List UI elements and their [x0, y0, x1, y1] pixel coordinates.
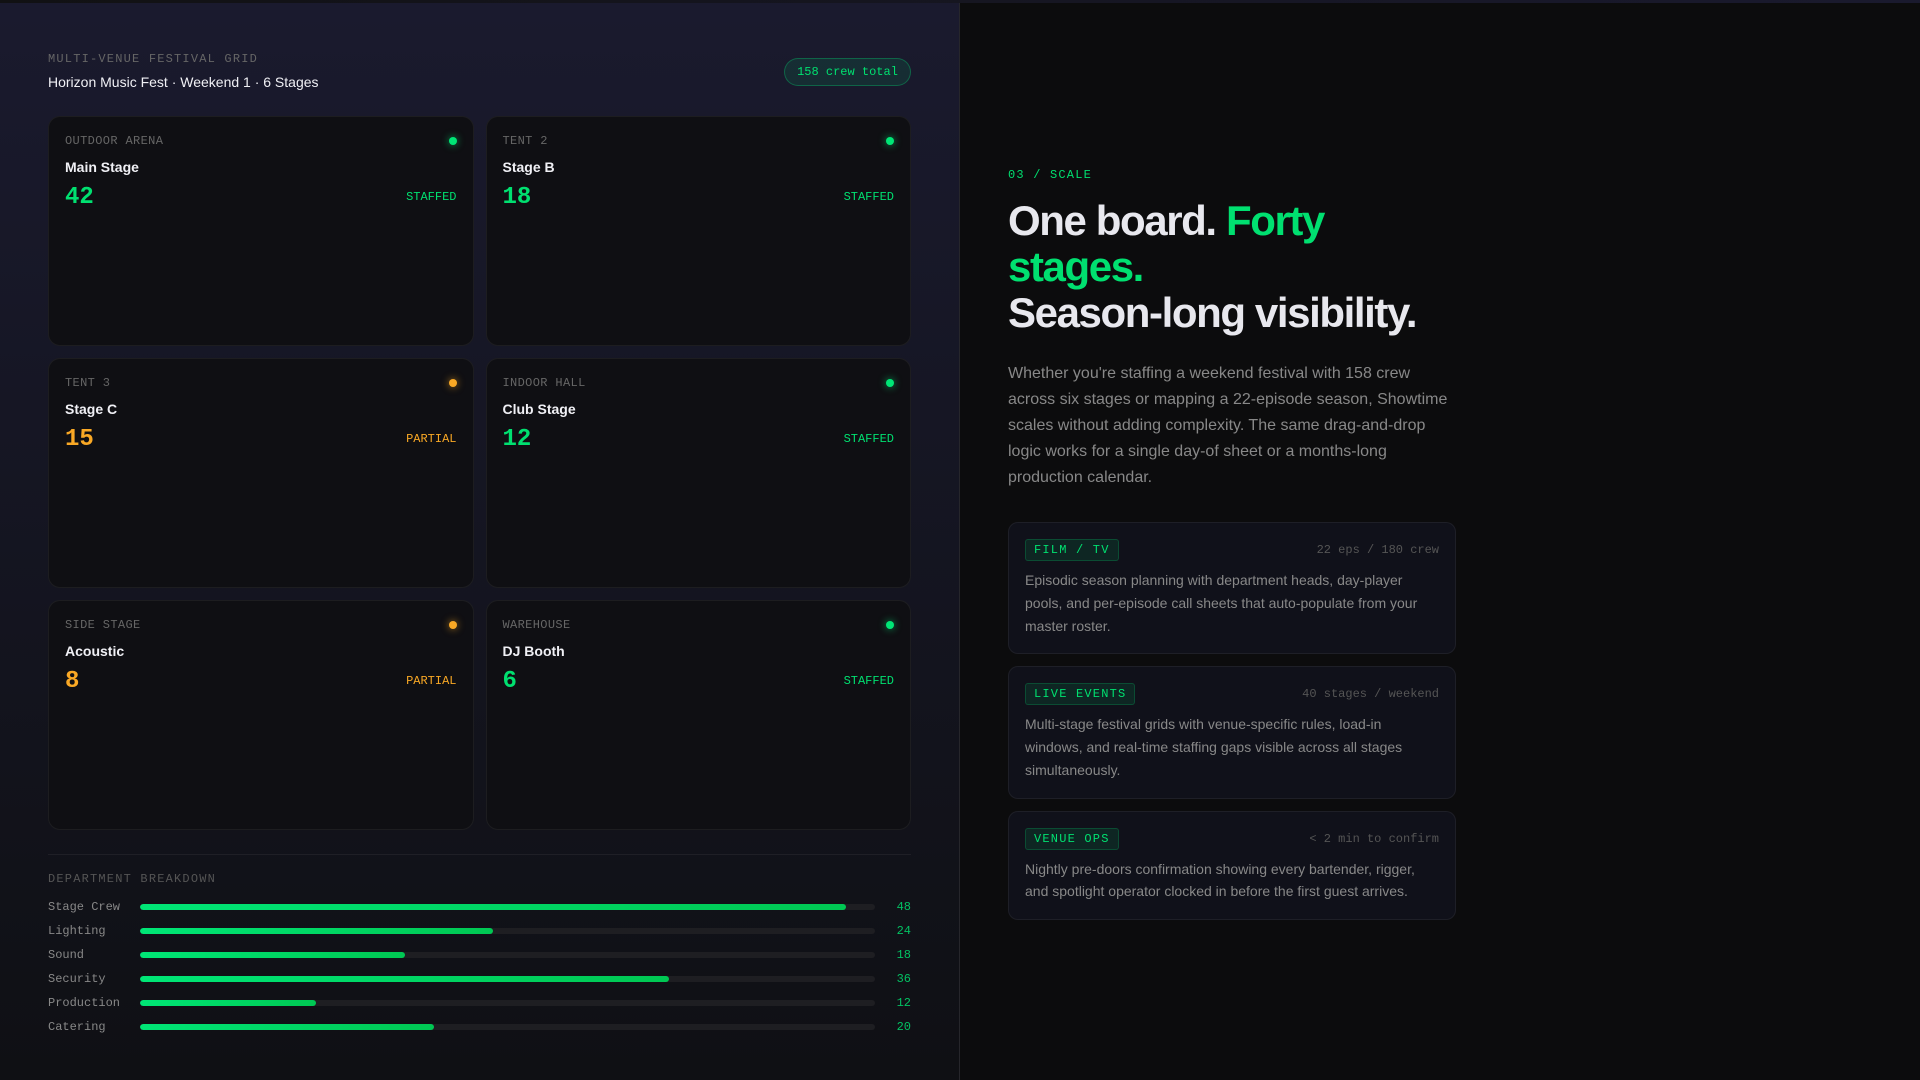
- use case card: Venue Ops: VENUE OPS: [1034, 832, 1110, 846]
- panel: scale copy background: [960, 0, 1920, 1080]
- bar: Security 36: 36: [897, 972, 911, 986]
- stage card: Club Stage: 12: [502, 426, 531, 453]
- use case card: Film / TV: Episodic season planning with department heads, day-player pools, and per-episode call sheets that auto-populate from your master roster.: [1025, 572, 1417, 634]
- bar: Production 12: [48, 996, 911, 1010]
- bar chart: department breakdown: [48, 900, 911, 1034]
- use case card: Film / TV: 22 eps / 180 crew: [1317, 543, 1439, 557]
- use case card: Live Events: 40 stages / weekend: [1302, 687, 1439, 701]
- bar: Stage Crew 48: [48, 900, 911, 914]
- stage card: Club Stage: STAFFED: [844, 432, 894, 446]
- bar: Stage Crew 48: Stage Crew: [48, 900, 120, 914]
- intro paragraph: Whether you're staffing a weekend festival with 158 crew across six stages or mapping a 22-episode season, Showtime scales without adding complexity. The same drag-and-drop logic works for a single day-of sheet or a months-long production calendar.: [1008, 365, 1447, 486]
- bar: Sound 18: 18: [897, 948, 911, 962]
- top accent line: [0, 0, 1920, 3]
- use case card: Film / TV: [1008, 522, 1456, 654]
- use case card: Live Events: LIVE EVENTS: [1034, 687, 1126, 701]
- stage card: Acoustic: [48, 600, 474, 830]
- headline: One board. Forty stages.: [1008, 197, 1324, 290]
- stage card: Stage C: 15: [65, 426, 94, 453]
- stage card: Stage C: TENT 3: [65, 376, 110, 390]
- bar: Sound 18: [48, 948, 911, 962]
- use case card: Venue Ops: < 2 min to confirm: [1309, 832, 1439, 846]
- heading: department breakdown: DEPARTMENT BREAKDOWN: [48, 872, 216, 886]
- stage card: Stage C: [48, 358, 474, 588]
- stage card: Club Stage: INDOOR HALL: [502, 376, 586, 390]
- stage card: DJ Booth: DJ Booth: [502, 642, 565, 658]
- stage card: Stage B: Stage B: [502, 158, 555, 174]
- bar: Sound 18: Sound: [48, 948, 84, 962]
- stage card: Stage C: Stage C: [65, 400, 117, 416]
- stage card: Club Stage: [486, 358, 911, 588]
- stage card: Main Stage: OUTDOOR ARENA: [65, 134, 163, 148]
- stage card: Club Stage: Club Stage: [502, 400, 576, 416]
- bar: Stage Crew 48: 48: [897, 900, 911, 914]
- eyebrow: section label: 03 / SCALE: [1008, 168, 1092, 182]
- use case card: Live Events: Multi-stage festival grids with venue-specific rules, load-in windows, and real-time staffing gaps visible across all stages simultaneously.: [1025, 716, 1402, 778]
- headline: [1008, 197, 1416, 336]
- stage card: Acoustic: SIDE STAGE: [65, 618, 141, 632]
- bar: Security 36: Security: [48, 972, 106, 986]
- stage card: DJ Booth: 6: [502, 668, 517, 695]
- panel: festival grid: [0, 0, 960, 1080]
- headline: Season-long visibility.: [1008, 289, 1416, 336]
- use case card: Film / TV: FILM / TV: [1034, 543, 1110, 557]
- bar: Production 12: Production: [48, 996, 120, 1010]
- stage card: DJ Booth: WAREHOUSE: [502, 618, 571, 632]
- bar: Lighting 24: Lighting: [48, 924, 106, 938]
- stage card: Stage B: TENT 2: [502, 134, 548, 148]
- use case card: Venue Ops: [1008, 811, 1456, 920]
- stage card: Main Stage: 42: [65, 184, 94, 211]
- stage card: Main Stage: STAFFED: [406, 190, 456, 204]
- stage card: Acoustic: 8: [65, 668, 79, 695]
- festival title: Horizon Music Fest · Weekend 1 · 6 Stages: [48, 74, 319, 90]
- bar: Catering 20: [48, 1020, 911, 1034]
- bar: Catering 20: 20: [897, 1020, 911, 1034]
- stage card: Stage B: 18: [502, 184, 531, 211]
- bar: Lighting 24: 24: [897, 924, 911, 938]
- stage card: Main Stage: [48, 116, 474, 346]
- stage card: DJ Booth: STAFFED: [844, 674, 894, 688]
- use case card: Live Events: [1008, 666, 1456, 799]
- stage card: Main Stage: Main Stage: [65, 158, 139, 174]
- eyebrow: multi-venue festival grid: MULTI-VENUE FESTIVAL GRID: [48, 52, 258, 66]
- badge: crew total: [784, 58, 911, 86]
- badge: crew total: 158 crew total: [797, 65, 898, 79]
- bar: Production 12: 12: [897, 996, 911, 1010]
- bar: Lighting 24: [48, 924, 911, 938]
- stage card: Acoustic: PARTIAL: [406, 674, 456, 688]
- stage card: Stage B: [486, 116, 911, 346]
- stage card: DJ Booth: [486, 600, 911, 830]
- stage card: Stage C: PARTIAL: [406, 432, 456, 446]
- bar: Security 36: [48, 972, 911, 986]
- use case card: Venue Ops: Nightly pre-doors confirmation showing every bartender, rigger, and spotlight operator clocked in before the first guest arrives.: [1025, 860, 1415, 898]
- bar: Catering 20: Catering: [48, 1020, 106, 1034]
- stage card: Stage B: STAFFED: [844, 190, 894, 204]
- stage card: Acoustic: Acoustic: [65, 642, 124, 658]
